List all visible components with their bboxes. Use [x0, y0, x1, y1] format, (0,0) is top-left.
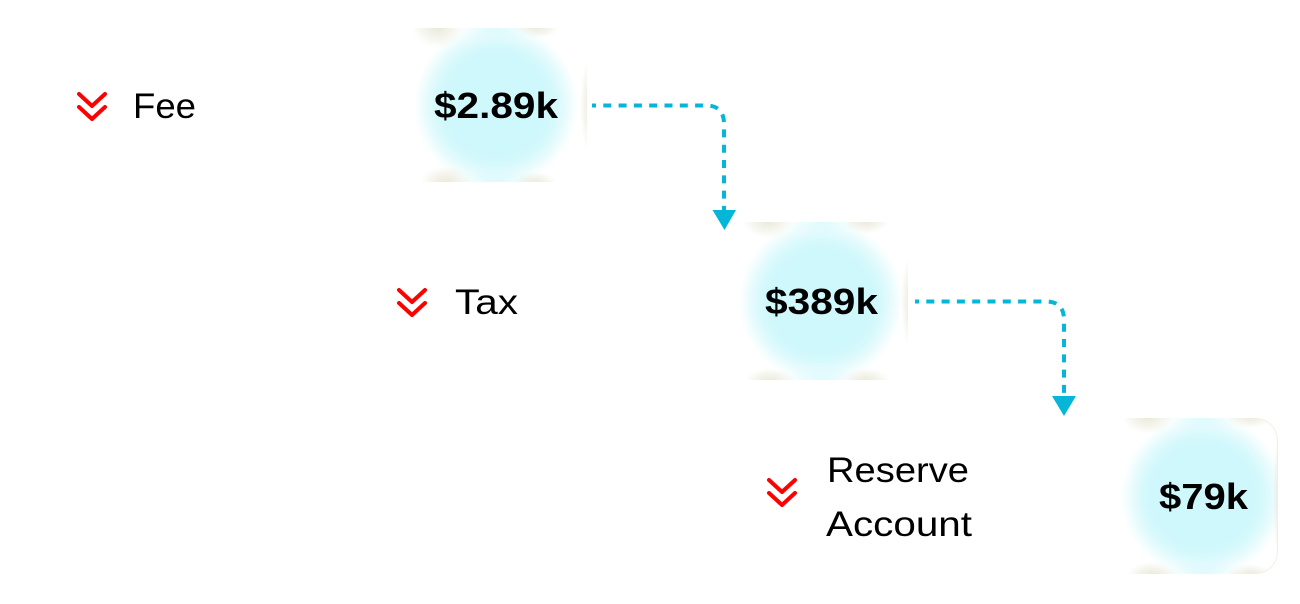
label: Reserve Account: Account — [826, 505, 972, 544]
row: Fee — [79, 87, 196, 126]
value blob: $389k — [743, 222, 908, 380]
value blob: $2.89k: $2.89k — [434, 85, 559, 126]
value blob: $389k: $389k — [765, 281, 879, 322]
icon: red double chevron down — [79, 94, 105, 119]
icon: red double chevron down — [399, 290, 425, 315]
value blob: $2.89k — [418, 28, 587, 182]
label: Reserve Account — [826, 451, 972, 544]
value blob: $79k: $79k — [1159, 476, 1249, 517]
row: Tax — [399, 283, 519, 322]
label: Tax: Tax — [455, 283, 519, 322]
icon: red double chevron down — [769, 480, 795, 505]
row: Reserve Account — [769, 451, 972, 544]
label: Fee: Fee — [133, 87, 196, 126]
value blob: $79k — [1125, 418, 1278, 574]
arrow: Tax to Reserve Account — [915, 302, 1076, 416]
arrow: Fee to Tax — [592, 106, 736, 230]
label: Reserve Account: Reserve — [827, 451, 969, 490]
